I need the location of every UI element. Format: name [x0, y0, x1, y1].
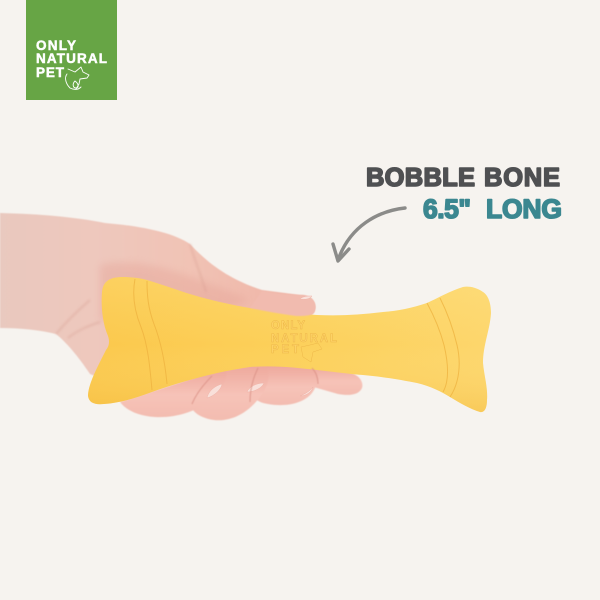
heading: length: LONG	[486, 194, 562, 224]
bone ridges	[134, 279, 459, 397]
wrist creases	[56, 244, 206, 338]
logo wordmark: PET	[36, 65, 65, 80]
logo: Only Natural Pet	[26, 0, 117, 100]
heading: product name	[366, 164, 560, 192]
fingernails	[207, 296, 313, 398]
palm and wrist	[0, 213, 315, 378]
logo wordmark	[36, 38, 107, 80]
index finger	[120, 368, 227, 417]
ring finger	[248, 365, 318, 405]
embossed bone logo	[271, 320, 337, 362]
photo: hand holding bone	[0, 213, 491, 420]
bone shading	[88, 277, 491, 412]
heading: product name: BONE	[484, 164, 560, 192]
hand	[0, 213, 362, 420]
embossed bone logo: NATURAL	[271, 333, 337, 345]
embossed bone logo: ONLY	[271, 320, 305, 332]
thumb overlap detail	[250, 291, 315, 316]
heading: product name: BOBBLE	[366, 164, 475, 192]
icon: cat and dog outline	[66, 67, 89, 89]
finger separations	[192, 368, 318, 404]
bone toy	[88, 277, 491, 412]
logo wordmark: NATURAL	[36, 51, 107, 66]
middle finger	[190, 364, 269, 420]
heading: length	[423, 194, 562, 224]
heading: length: 6.5"	[423, 194, 471, 224]
arrow	[333, 208, 405, 261]
logo wordmark: ONLY	[36, 38, 76, 53]
pinky	[300, 365, 362, 395]
embossed bone logo: PET	[271, 344, 299, 356]
palm shadow	[100, 262, 250, 320]
